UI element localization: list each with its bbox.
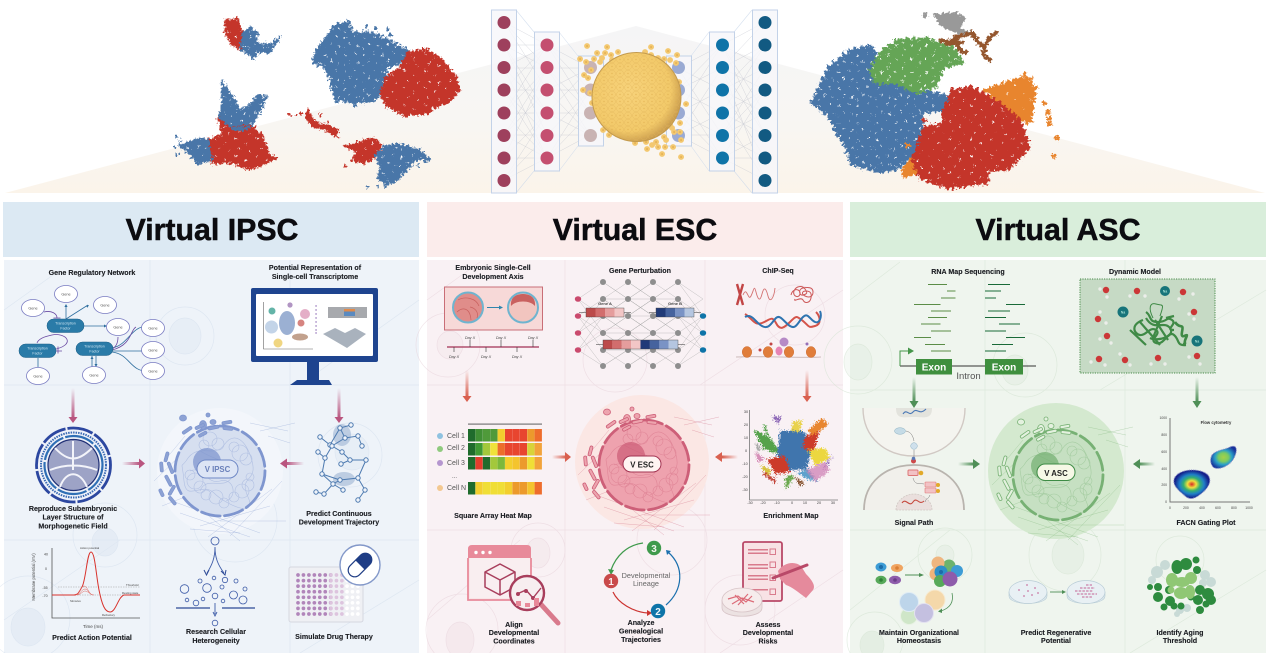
gene model with exons: Exon — [992, 362, 1016, 374]
gene model with exons: Exon — [922, 362, 946, 374]
lineage label — [622, 571, 671, 588]
node 2: 2 — [655, 607, 661, 618]
caption: homeostasis — [879, 629, 959, 645]
DNA helix — [745, 311, 821, 328]
caption: regenerative potential: Potential — [1041, 637, 1071, 645]
gene node labels: Gene — [33, 374, 43, 378]
diagram: gene regulatory network — [19, 286, 164, 384]
arrow: circos to central cell — [122, 458, 145, 468]
row labels — [447, 433, 466, 492]
reads over first exon — [914, 284, 956, 351]
icon: embryo development box — [444, 287, 542, 330]
timeline: day X axis: Day X — [465, 336, 476, 340]
arrow: enrichment to central cell — [715, 452, 738, 462]
row 2 — [468, 443, 542, 456]
caption: Potential Representation: Potential Representation of — [269, 264, 362, 272]
caption: genealogical trajectories: Analyze — [628, 619, 654, 627]
caption: subembryonic layer: Reproduce Subembryonic — [29, 505, 117, 513]
chart: action potential: Refractory — [102, 613, 116, 617]
neural network connections — [504, 10, 765, 193]
caption: action potential: Predict Action Potential — [52, 634, 132, 642]
nucleosome beads — [736, 338, 821, 358]
chart: flow cytometry: 800 — [1161, 433, 1167, 437]
gene node labels: Gene — [148, 348, 158, 352]
caption: Potential Representation — [269, 264, 362, 281]
blue population — [812, 45, 952, 172]
timeline: day X axis: Day X — [481, 355, 492, 359]
water molecules — [1089, 287, 1202, 367]
gene A block: Gene A — [598, 301, 612, 306]
icon: chromosome, DNA and nucleosomes — [736, 284, 821, 358]
caption: align coordinates: Developmental — [489, 629, 539, 637]
golden embryo sphere with surrounding cells — [580, 46, 686, 157]
chart: flow cytometry: 400 — [1161, 467, 1167, 471]
icon: aging cell aggregate — [1147, 556, 1216, 617]
chart: enrichment map: -10 — [742, 462, 748, 466]
caption: genealogical trajectories: Trajectories — [621, 636, 661, 644]
ions: Na — [1195, 340, 1199, 344]
row N — [468, 482, 542, 494]
chart: enrichment map: 0 — [791, 501, 793, 505]
central cell: V ESC — [575, 395, 719, 535]
transcription factor labels: Factor — [60, 326, 71, 330]
caption: subembryonic layer — [29, 505, 117, 530]
green population — [870, 38, 962, 93]
icon: drug well plate — [289, 545, 380, 622]
chart: flow cytometry: Flow cytometry — [1201, 420, 1232, 425]
caption: development axis — [455, 264, 531, 281]
chart: enrichment map: 10 — [803, 501, 807, 505]
chart: flow cytometry: 600 — [1215, 506, 1221, 510]
chart: flow cytometry: 600 — [1161, 450, 1167, 454]
gene model with exons — [900, 348, 1036, 382]
transcription factor labels: Factor — [32, 352, 43, 356]
row 3 — [468, 457, 542, 470]
chart: enrichment map: 20 — [744, 423, 748, 427]
transcription factor labels — [27, 322, 105, 356]
caption: cellular heterogeneity: Heterogeneity — [192, 637, 240, 645]
chart: enrichment map: 30 — [744, 410, 748, 414]
row labels: ... — [452, 474, 457, 480]
icon: capsule — [340, 545, 380, 585]
chart: flow cytometry: 200 — [1183, 506, 1189, 510]
chart: action potential: -70 — [42, 594, 48, 598]
lineage label: Developmental — [622, 571, 671, 580]
panel: Virtual ESC — [416, 202, 843, 653]
chart: enrichment map: 30 — [831, 501, 835, 505]
caption: developmental risks: Risks — [759, 638, 778, 646]
row labels: Cell 2 — [447, 445, 465, 452]
cluster: lower-left blue and red — [174, 82, 278, 170]
caption: align coordinates: Coordinates — [493, 638, 535, 646]
chart: flow cytometry: 200 — [1161, 483, 1167, 487]
combined gene block — [596, 340, 685, 349]
caption: subembryonic layer: Layer Structure of — [42, 514, 104, 522]
arrow: signal path to central cell — [958, 459, 980, 469]
brown population — [940, 33, 996, 60]
arrow: exon to signal path — [910, 377, 918, 408]
ions — [1118, 286, 1202, 346]
protein ribbon — [1130, 304, 1187, 345]
caption: align coordinates: Align — [505, 621, 523, 629]
chart: flow cytometry: 400 — [1199, 506, 1205, 510]
caption: drug therapy: Simulate Drug Therapy — [295, 633, 373, 641]
caption: developmental risks — [743, 621, 793, 646]
gray heat strip in monitor — [328, 307, 367, 318]
caption: gene perturbation: Gene Perturbation — [609, 267, 671, 275]
caption: genealogical trajectories — [619, 619, 663, 644]
scatter plot: left clustered cells — [174, 18, 460, 187]
caption: homeostasis: Homeostasis — [897, 637, 941, 645]
V ESC label — [623, 456, 661, 472]
chart: flow cytometry: 1000 — [1159, 416, 1167, 420]
caption: continuous trajectory: Development Trajectory — [299, 518, 379, 526]
cluster: lower-right red and blue — [345, 138, 430, 187]
caption: regenerative potential — [1021, 629, 1091, 645]
chart: action potential: Threshold — [126, 583, 139, 587]
caption: heat map: Square Array Heat Map — [454, 512, 533, 520]
caption: developmental risks: Developmental — [743, 629, 793, 637]
caption: FACN gating plot: FACN Gating Plot — [1176, 519, 1236, 527]
caption: ChIP-Seq: ChIP-Seq — [762, 267, 794, 275]
panel: Virtual ASC — [824, 202, 1266, 653]
caption: aging threshold: Identify Aging — [1156, 629, 1204, 637]
chart: action potential: Stimulus — [70, 599, 81, 603]
chart: enrichment map — [742, 410, 838, 505]
orange population — [902, 75, 1056, 177]
gene node labels — [28, 292, 158, 378]
ions: Na — [1121, 310, 1125, 314]
central cell: V ASC — [988, 403, 1133, 545]
V ASC label — [1037, 464, 1075, 480]
chart: action potential: -55 — [42, 586, 48, 590]
icon: regenerative petri dishes — [1009, 580, 1105, 604]
transcription factor labels: Transcription — [27, 346, 48, 350]
red population — [912, 87, 1030, 188]
caption: homeostasis: Maintain Organizational — [879, 629, 959, 637]
icon: cellular heterogeneity — [176, 537, 255, 626]
gene node labels: Gene — [100, 304, 110, 308]
gene node labels: Gene — [148, 370, 158, 374]
chart: action potential — [31, 546, 140, 629]
icon: window with magnifier — [468, 545, 558, 623]
population: low gate density — [1174, 470, 1210, 499]
icon: organizational homeostasis cell clusters — [876, 556, 963, 624]
caption: regenerative potential: Predict Regenerative — [1021, 629, 1091, 637]
gene node labels: Gene — [89, 374, 99, 378]
chart: action potential: 0 — [45, 567, 47, 571]
panel: Virtual IPSC — [0, 202, 419, 653]
caption: developmental risks: Assess — [756, 621, 780, 629]
arrow: monitor to trajectory — [334, 388, 344, 423]
caption: cellular heterogeneity: Research Cellular — [186, 628, 246, 636]
box: protein dynamic model — [1080, 279, 1215, 373]
icon: risk clipboard with hand and dish — [722, 542, 814, 616]
lineage label: Lineage — [633, 579, 659, 588]
central cell: V IPSC — [154, 408, 295, 541]
scatter plot: right clustered cells — [812, 13, 1056, 188]
cell clusters in monitor — [265, 302, 310, 348]
landscape plot in monitor — [323, 328, 366, 348]
caption: aging threshold — [1156, 629, 1204, 645]
heading band: Virtual ESC: Virtual ESC — [553, 214, 717, 247]
panel body: ASC — [824, 260, 1266, 653]
diagram: RNA read pileup — [900, 284, 1036, 382]
assembled cluster — [930, 556, 963, 587]
chart: enrichment map: -20 — [742, 475, 748, 479]
V ASC label: V ASC — [1044, 469, 1068, 478]
caption: Gene Regulatory Network: Gene Regulatory Network — [49, 269, 135, 277]
hand holding pencil — [773, 563, 814, 598]
caption: RNA Map Sequencing: RNA Map Sequencing — [931, 268, 1005, 276]
arrow: trajectory to central cell — [280, 458, 304, 468]
caption: aging threshold: Threshold — [1163, 637, 1197, 645]
reads over second exon — [985, 284, 1025, 351]
cluster: small red strand — [306, 108, 338, 137]
V IPSC label: V IPSC — [205, 465, 231, 474]
chart: enrichment map: 10 — [744, 436, 748, 440]
chart: action potential: Action potential — [80, 546, 100, 550]
chromosome and thread — [737, 284, 813, 305]
gene model with exons: Intron — [956, 371, 981, 382]
chart: enrichment map: -10 — [774, 501, 780, 505]
diagram: developmental lineage cycle — [604, 541, 680, 618]
heading band: Virtual ASC: Virtual ASC — [976, 214, 1141, 247]
neural network layer 6 — [752, 10, 778, 193]
chart: enrichment map: -30 — [742, 488, 748, 492]
timeline: day X axis — [447, 336, 539, 359]
population: high gate density — [1211, 446, 1236, 468]
arrow: axis to heatmap — [462, 370, 472, 402]
transcription factor labels: Factor — [89, 350, 100, 354]
heading band: Virtual ASC — [850, 202, 1266, 257]
arrow: heatmap to central cell — [552, 452, 571, 462]
row labels: Cell N — [447, 485, 466, 492]
chart: enrichment map: -20 — [760, 501, 766, 505]
timeline: day X axis: Day X — [528, 336, 539, 340]
caption: continuous trajectory — [299, 510, 379, 526]
icon: morphogenetic circos plot — [35, 426, 112, 504]
network: gene perturbation — [575, 279, 706, 369]
enrichment clusters — [755, 416, 833, 490]
caption: genealogical trajectories: Genealogical — [619, 628, 663, 636]
V ESC label: V ESC — [630, 460, 654, 470]
top banner: pale mountain backdrop — [5, 26, 1265, 193]
arrow: ChIP-Seq to enrichment — [802, 370, 812, 402]
neural network layer 2 — [534, 32, 560, 171]
chart: flow cytometry: 800 — [1231, 506, 1237, 510]
network: continuous development trajectory — [314, 423, 368, 502]
cluster: large blue and red — [312, 21, 460, 116]
chart: enrichment map: 0 — [745, 449, 747, 453]
heatmap: square array — [437, 424, 542, 494]
chart: flow cytometry: 0 — [1165, 500, 1167, 504]
caption: signal path: Signal Path — [895, 519, 933, 527]
V IPSC label — [197, 460, 238, 478]
row 1 — [468, 429, 542, 442]
row labels: Cell 3 — [447, 460, 465, 467]
neural network layer 1 — [492, 10, 516, 193]
node 3: 3 — [651, 544, 657, 555]
caption: continuous trajectory: Predict Continuous — [306, 510, 372, 518]
gene node ellipses — [22, 286, 164, 384]
arrow: dynamic model to flow plot — [1192, 377, 1202, 408]
legend dots in monitor — [315, 306, 317, 333]
chart: action potential: 40 — [44, 552, 48, 556]
panel body: ESC — [416, 260, 843, 653]
caption: subembryonic layer: Morphogenetic Field — [38, 522, 108, 530]
row labels: Cell 1 — [447, 433, 465, 440]
chart: action potential: Resting state — [122, 591, 139, 595]
caption: development axis: Development Axis — [462, 273, 524, 281]
transcription factor pills — [19, 319, 113, 358]
ions: Na — [1163, 290, 1167, 294]
node 1: 1 — [608, 577, 614, 588]
chart: action potential: Time (ms) — [83, 624, 104, 629]
timeline: day X axis: Day X — [496, 336, 507, 340]
gene B block: Gene B — [668, 301, 682, 306]
arrow: flow plot to central cell — [1133, 459, 1155, 469]
chart: enrichment map: -30 — [747, 501, 753, 505]
panel body: IPSC — [0, 260, 419, 653]
petri dish — [722, 588, 762, 616]
timeline: day X axis: Day X — [449, 355, 460, 359]
chart: flow cytometry: 0 — [1169, 506, 1171, 510]
arrow: network to circos — [68, 388, 78, 423]
chart: flow cytometry: 1000 — [1245, 506, 1253, 510]
gene node labels: Gene — [113, 326, 123, 330]
diagram: signal pathway in two cells — [863, 408, 965, 510]
caption: cellular heterogeneity — [186, 628, 246, 645]
caption: Dynamic Model: Dynamic Model — [1109, 268, 1161, 276]
cluster: top-left small red and blue — [225, 18, 280, 60]
gray population — [925, 13, 970, 33]
neural network layer 5 — [710, 32, 734, 171]
caption: align coordinates — [489, 621, 539, 646]
spheroid cluster — [900, 590, 945, 624]
heading band: Virtual IPSC: Virtual IPSC — [126, 214, 299, 247]
heading band: Virtual ESC — [427, 202, 843, 257]
heading band: Virtual IPSC — [3, 202, 419, 257]
chart: action potential: Membrane potential (mV) — [31, 553, 36, 601]
outlier dots: red strand — [290, 113, 328, 122]
monitor with transcriptome plots — [251, 288, 378, 385]
caption: development axis: Embryonic Single-Cell — [455, 264, 531, 272]
chart: flow cytometry — [1159, 416, 1253, 510]
gene node labels: Gene — [28, 306, 38, 310]
transcription factor labels: Transcription — [84, 344, 105, 348]
caption: Potential Representation: Single-cell Transcriptome — [272, 273, 358, 281]
timeline: day X axis: Day X — [512, 355, 523, 359]
neural network layer 4 — [666, 56, 692, 146]
neural network layer 3 — [578, 56, 604, 146]
gene node labels: Gene — [148, 326, 158, 330]
transcription factor labels: Transcription — [55, 322, 76, 326]
chart: enrichment map: 20 — [817, 501, 821, 505]
gene node labels: Gene — [61, 292, 71, 296]
row cell dots — [437, 433, 443, 491]
caption: enrichment map: Enrichment Map — [763, 512, 819, 520]
